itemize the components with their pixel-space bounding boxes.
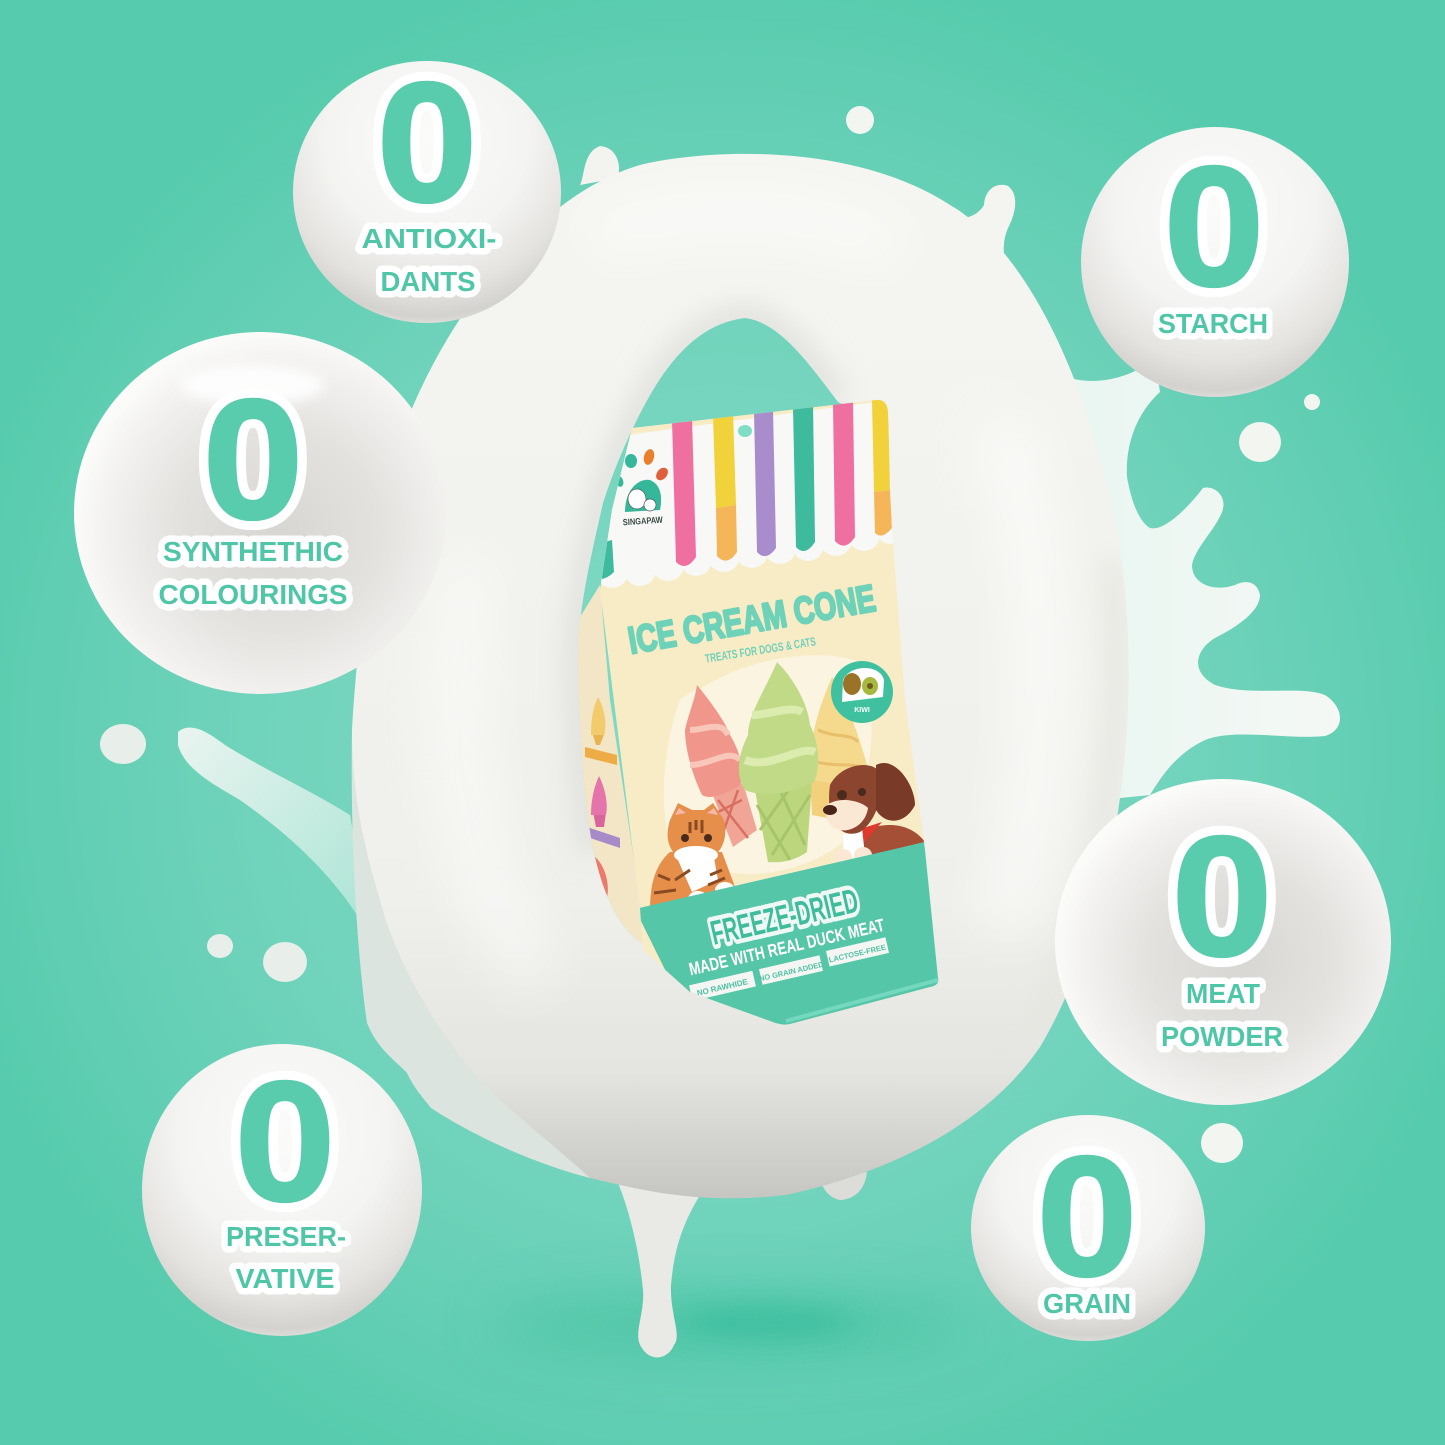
highlight [180, 365, 324, 405]
bubble: synthetic colourings [74, 332, 446, 694]
cone: red [685, 685, 757, 847]
zero: 0 [1037, 1122, 1137, 1312]
title: ice cream cone: ICE CREAM CONE [625, 578, 879, 663]
zero: 0 [1037, 1122, 1137, 1312]
awning [590, 398, 904, 588]
ground shadow [490, 1295, 970, 1355]
subtitle: TREATS FOR DOGS & CATS [704, 634, 817, 666]
stripes [592, 398, 892, 579]
zero: 0 [1172, 802, 1272, 992]
zero: 0 [235, 1047, 335, 1237]
zero: 0 [1172, 802, 1272, 992]
milk droplets [100, 106, 1320, 1163]
second bag behind [578, 585, 642, 944]
product bag [600, 400, 938, 1025]
zero: 0 [203, 365, 303, 555]
cat [650, 803, 735, 906]
label: ANTIOXI- [362, 223, 496, 254]
green band [635, 842, 945, 1030]
milk ring [352, 154, 1129, 1198]
label: STARCH [1158, 308, 1268, 339]
zero: 0 [1164, 132, 1264, 322]
bottom seal highlight [786, 980, 938, 1021]
cone: yellow [810, 677, 868, 820]
small cones on side of back bag [585, 697, 620, 897]
label: PRESER- [226, 1221, 346, 1252]
label line 2: DANTS [380, 266, 476, 297]
label line 2: POWDER [1161, 1021, 1283, 1052]
milk drip: small [820, 1172, 867, 1200]
dog [823, 763, 925, 865]
badge: no rawhide: NO RAWHIDE [696, 977, 749, 998]
bubble: starch [1081, 127, 1349, 397]
splash: right side [1070, 360, 1340, 800]
hang hole [738, 425, 752, 437]
label: SYNTHETHIC [163, 536, 343, 567]
kiwi badge: KIWI [854, 707, 870, 714]
made with real duck meat: MADE WITH REAL DUCK MEAT [687, 915, 886, 979]
logo [618, 449, 668, 526]
label line 2: VATIVE [236, 1263, 334, 1294]
logo: SINGAPAW [622, 515, 664, 527]
zero: 0 [203, 365, 303, 555]
kiwi badge [831, 661, 893, 723]
badge: lactose-free [826, 937, 889, 967]
badge: no grain added: NO GRAIN ADDED [758, 960, 825, 983]
bubble: grain [971, 1115, 1205, 1341]
freeze-dried label: FREEZE-DRIED [707, 882, 862, 953]
label line 2: COLOURINGS [158, 579, 348, 610]
badge: lactose-free: LACTOSE-FREE [828, 943, 887, 964]
milk spike: top left [580, 146, 619, 185]
milk swirl behind cones [664, 655, 872, 874]
zero: 0 [377, 48, 477, 238]
splash: left side [178, 728, 372, 940]
bubble: meat powder [1055, 779, 1391, 1105]
cone: green [739, 662, 818, 862]
milk ring crescent: lower left [352, 730, 590, 1178]
bubble: antioxidants [293, 48, 561, 323]
zero: 0 [377, 48, 477, 238]
zero: 0 [1164, 132, 1264, 322]
bubble: preservative [142, 1044, 422, 1336]
label: GRAIN [1043, 1288, 1131, 1319]
zero: 0 [235, 1047, 335, 1237]
milk spike: top right [950, 185, 1015, 265]
bag body [600, 400, 938, 972]
label: MEAT [1186, 978, 1260, 1009]
milk drip: bottom [612, 1170, 700, 1357]
badge: no rawhide [689, 971, 756, 1001]
